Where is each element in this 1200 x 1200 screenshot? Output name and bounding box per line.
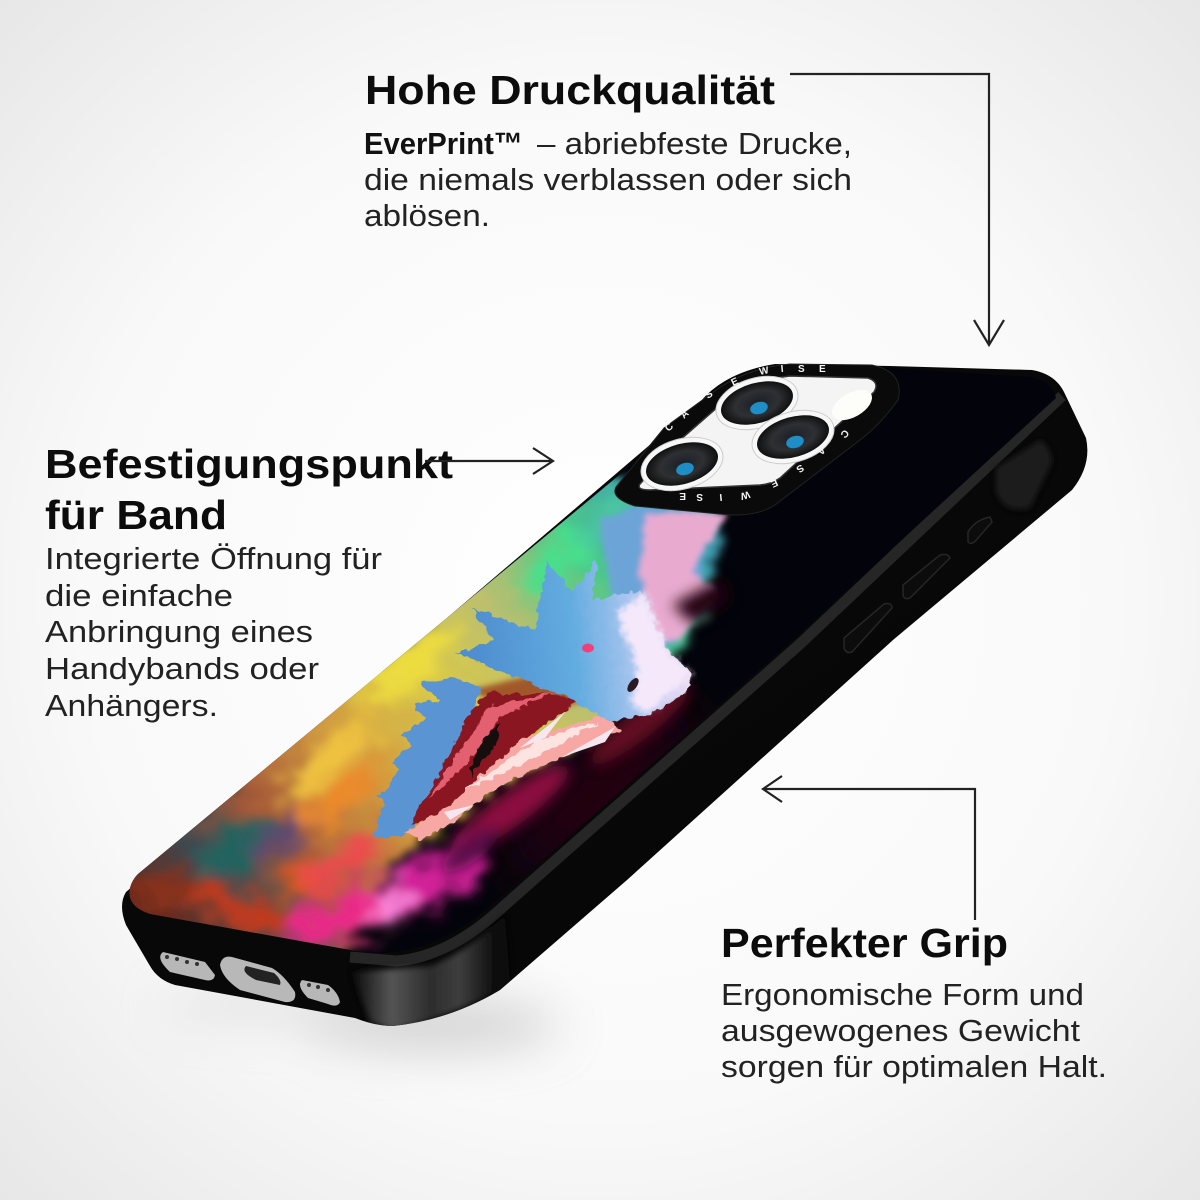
lens top [710, 367, 804, 439]
phone shadow [160, 989, 560, 1051]
heading: Perfekter Grip [721, 920, 1008, 966]
camera window [639, 376, 876, 490]
text block: sorgen für optimalen Halt. [721, 1049, 1107, 1084]
text block: ausgewogenes Gewicht [721, 1013, 1080, 1048]
dragon head [458, 560, 692, 722]
text block: EverPrint™ [364, 126, 523, 161]
arrow [425, 448, 553, 474]
side rim highlight [350, 396, 1062, 961]
heading: für Band [45, 492, 227, 538]
charging port [220, 957, 295, 1002]
shadow behind dragon jaw [475, 676, 580, 709]
text block: Handybands oder [45, 651, 319, 686]
artwork mane glow [600, 505, 730, 650]
text block [45, 541, 382, 723]
text block: die niemals verblassen oder sich [364, 162, 852, 197]
phone case illustration [100, 350, 1100, 1030]
dragon neck [372, 678, 480, 838]
text block: die einfache [45, 578, 233, 613]
arrow [763, 776, 975, 920]
lens left [635, 428, 729, 500]
dragon teeth [444, 712, 615, 820]
camera island [615, 364, 899, 515]
arrow [790, 74, 1004, 345]
callout: grip [721, 776, 1107, 1084]
icon: dragon [372, 560, 692, 840]
callout: print quality [364, 67, 1004, 345]
dragon eye [582, 644, 594, 652]
logo text bottom: CASEWISE [679, 427, 851, 502]
artwork dark patch beside mane [672, 578, 730, 625]
bottom corner gloss [356, 932, 512, 1026]
face artwork [100, 350, 1100, 1000]
text block: – abriebfeste Drucke, [537, 126, 852, 161]
text block [721, 977, 1107, 1084]
logo text top: CASEWISE [663, 364, 826, 434]
dragon lower jaw [405, 716, 622, 840]
text block: Integrierte Öffnung für [45, 541, 382, 576]
heading: Hohe Druckqualität [365, 67, 775, 113]
heading: Befestigungspunkt [45, 441, 453, 487]
text block: ablösen. [364, 198, 490, 233]
camera flash [827, 384, 877, 426]
artwork crimson below jaw [435, 676, 697, 880]
heading [45, 441, 453, 538]
case body [122, 364, 1087, 1026]
camera bumper [615, 364, 899, 515]
artwork dark background glow [501, 708, 698, 878]
text block: Ergonomische Form und [721, 977, 1084, 1012]
speaker left [160, 952, 215, 980]
callout: strap attachment [45, 441, 553, 723]
lens right [746, 401, 840, 473]
dragon nostril [627, 678, 639, 692]
side strap lug [996, 440, 1052, 509]
dragon face highlight [618, 592, 692, 712]
text block: Anhängers. [45, 688, 218, 723]
text block: Anbringung eines [45, 614, 313, 649]
text block [364, 126, 852, 233]
dragon mouth [410, 692, 578, 825]
speaker right [300, 980, 340, 1006]
side buttons [844, 517, 992, 652]
artwork colour field [110, 470, 725, 970]
